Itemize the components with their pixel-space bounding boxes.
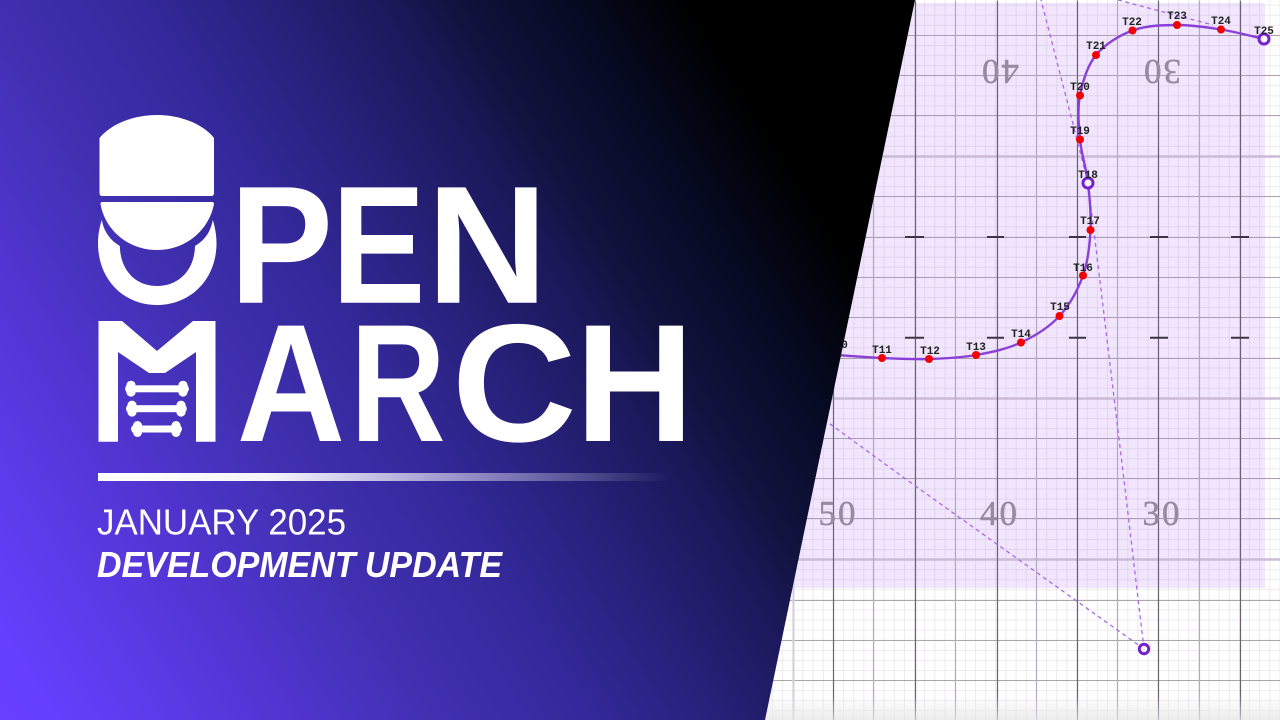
hollow anchor points xyxy=(1083,34,1269,654)
point labels: T16 xyxy=(1073,263,1093,275)
point labels: T22 xyxy=(1122,17,1142,29)
point labels: T19 xyxy=(1070,126,1090,138)
title word: ARCH: A xyxy=(237,289,345,477)
logo icon: drum major hat forming letter O xyxy=(98,115,216,305)
yard numbers, upright xyxy=(818,494,1182,533)
yard numbers, upright: 40 xyxy=(980,494,1019,533)
point labels: T24 xyxy=(1211,16,1231,28)
title word: PEN xyxy=(230,151,548,339)
point labels xyxy=(828,11,1274,358)
logo icon: letter M with dumbbell ladder xyxy=(98,321,216,442)
point labels: T15 xyxy=(1050,302,1070,314)
title word: PEN: P xyxy=(230,152,333,339)
yard numbers, upside down: 30 xyxy=(1142,52,1181,91)
point labels: T13 xyxy=(966,342,986,354)
title word: ARCH: C xyxy=(452,291,577,477)
staff tick marks xyxy=(905,237,1249,338)
dumbbell rung 3 xyxy=(131,421,182,437)
title word: PEN: E xyxy=(332,151,425,338)
title word: ARCH xyxy=(237,289,694,477)
yard numbers, upright: 50 xyxy=(818,494,858,533)
dashed control handles xyxy=(826,0,1213,649)
point labels: T11 xyxy=(872,345,892,357)
subtitle text: DEVELOPMENT UPDATE xyxy=(97,544,503,585)
yard numbers, upside down xyxy=(980,52,1181,91)
yard numbers, upside down: 40 xyxy=(980,52,1019,91)
yard numbers, upright: 30 xyxy=(1142,494,1182,533)
point labels: T12 xyxy=(920,346,940,358)
path point markers xyxy=(878,21,1225,363)
point labels: T21 xyxy=(1086,41,1106,53)
motion path curve xyxy=(830,25,1264,359)
point labels: T14 xyxy=(1011,329,1031,341)
panel: gradient title background xyxy=(0,0,915,720)
title word: ARCH: H xyxy=(575,291,694,477)
point labels: T10 xyxy=(828,340,848,352)
point labels: T18 xyxy=(1078,170,1098,182)
point labels: T23 xyxy=(1167,11,1187,23)
panel: graph paper drill chart xyxy=(700,0,1280,720)
point labels: T20 xyxy=(1070,82,1090,94)
title word: PEN: N xyxy=(427,151,548,339)
point labels: T25 xyxy=(1254,26,1274,38)
dumbbell rung 2 xyxy=(126,401,187,417)
date text: JANUARY 2025 xyxy=(97,502,346,542)
point labels: T17 xyxy=(1080,216,1100,228)
dumbbell rung 1 xyxy=(125,381,189,397)
title word: ARCH: R xyxy=(350,289,446,477)
divider rule xyxy=(98,473,670,481)
